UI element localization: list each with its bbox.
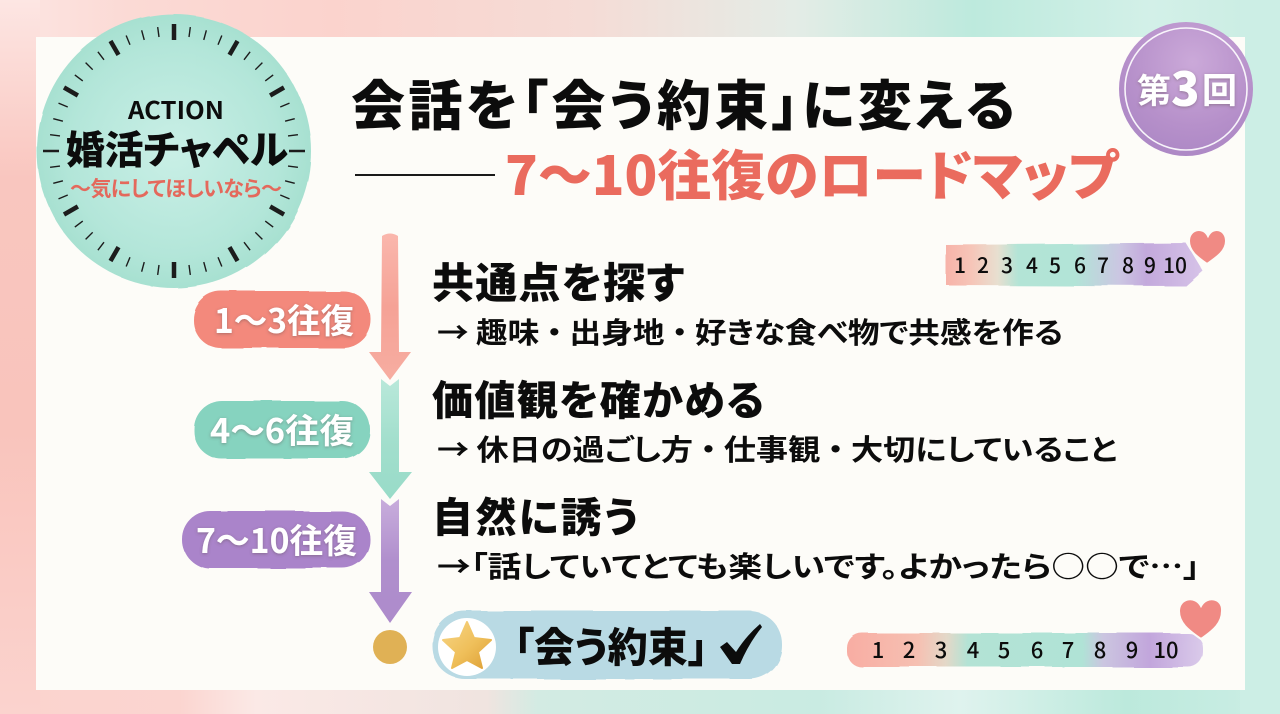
title rule xyxy=(355,174,495,176)
clock tick marks xyxy=(43,24,305,278)
pill: 1〜3往復: 1〜3往復 xyxy=(214,294,354,343)
step 3 detail: →「話していてとても楽しいです。よかったら○○で…」 xyxy=(437,544,1200,586)
bar 2 numbers: 8 xyxy=(1094,633,1106,665)
bar 2 numbers xyxy=(872,633,1179,665)
bar 1 numbers: 9 xyxy=(1144,250,1156,280)
clock badge xyxy=(37,14,311,288)
gold dot xyxy=(373,630,407,664)
bar 1 numbers: 4 xyxy=(1026,250,1038,280)
bar 1 numbers: 7 xyxy=(1097,250,1109,280)
round badge: 第3回: 3 xyxy=(1171,51,1200,120)
arrow: 7〜10往復 xyxy=(369,499,412,623)
pill: 4〜6往復: 4〜6往復 xyxy=(210,404,354,453)
round badge: 第3回: 回 xyxy=(1202,63,1237,114)
icon: check mark xyxy=(720,624,762,664)
bar 2 numbers: 5 xyxy=(998,633,1010,665)
bar 2 numbers: 3 xyxy=(935,633,947,665)
title line 2: 7〜10往復のロードマップ xyxy=(505,132,1119,211)
step 1 heading: 共通点を探す xyxy=(432,250,684,311)
icon: star xyxy=(438,618,496,676)
round badge: 第3回: 第 xyxy=(1137,64,1171,113)
bar 1 numbers: 6 xyxy=(1074,250,1086,280)
icon: heart 1 xyxy=(1189,230,1226,264)
bar 1 numbers: 2 xyxy=(977,250,989,280)
bar 1 numbers xyxy=(954,250,1187,280)
bar 2 numbers: 7 xyxy=(1062,633,1074,665)
step 2 detail: → 休日の過ごし方 ・ 仕事観 ・ 大切にしていること xyxy=(437,427,1117,469)
step 1 detail: → 趣味 ・ 出身地 ・ 好きな食べ物で共感を作る xyxy=(437,310,1063,352)
step 3 heading: 自然に誘う xyxy=(432,484,638,544)
arrow: 1〜3往復 xyxy=(369,234,411,380)
pill: 1〜3往復 xyxy=(193,291,371,348)
pill: 7〜10往復: 7〜10往復 xyxy=(196,514,357,563)
clock text: subtitle: 〜気にしてほしいなら〜 xyxy=(70,173,282,203)
bar 2 numbers: 4 xyxy=(967,633,979,665)
bar 2 numbers: 9 xyxy=(1126,633,1138,665)
bar 1 numbers: 8 xyxy=(1122,250,1134,280)
bar 2 numbers: 1 xyxy=(872,633,884,665)
goal text: 「会う約束」 xyxy=(514,614,708,674)
title line 1: 会話を「会う約束」に変える xyxy=(351,62,1015,141)
bar 1 numbers: 3 xyxy=(1001,250,1013,280)
clock text: ACTION: ACTION xyxy=(127,91,224,126)
step 2 heading: 価値観を確かめる xyxy=(432,367,764,427)
bar 2 numbers: 2 xyxy=(903,633,915,665)
bar 1 numbers: 5 xyxy=(1049,250,1061,280)
progress bar 2 xyxy=(847,633,1203,667)
pill: 4〜6往復 xyxy=(194,401,370,459)
bar 2 numbers: 6 xyxy=(1031,633,1043,665)
clock text: 婚活チャペル: 婚活チャペル xyxy=(66,120,288,176)
arrow: 4〜6往復 xyxy=(369,379,412,499)
bar 1 numbers: 10 xyxy=(1163,250,1187,280)
round badge: 第3回 xyxy=(1119,22,1253,156)
bar 2 numbers: 10 xyxy=(1153,633,1179,665)
goal pill xyxy=(432,611,782,679)
icon: heart 2 xyxy=(1179,599,1222,639)
progress bar 1 xyxy=(946,243,1203,286)
bar 1 numbers: 1 xyxy=(954,250,966,280)
